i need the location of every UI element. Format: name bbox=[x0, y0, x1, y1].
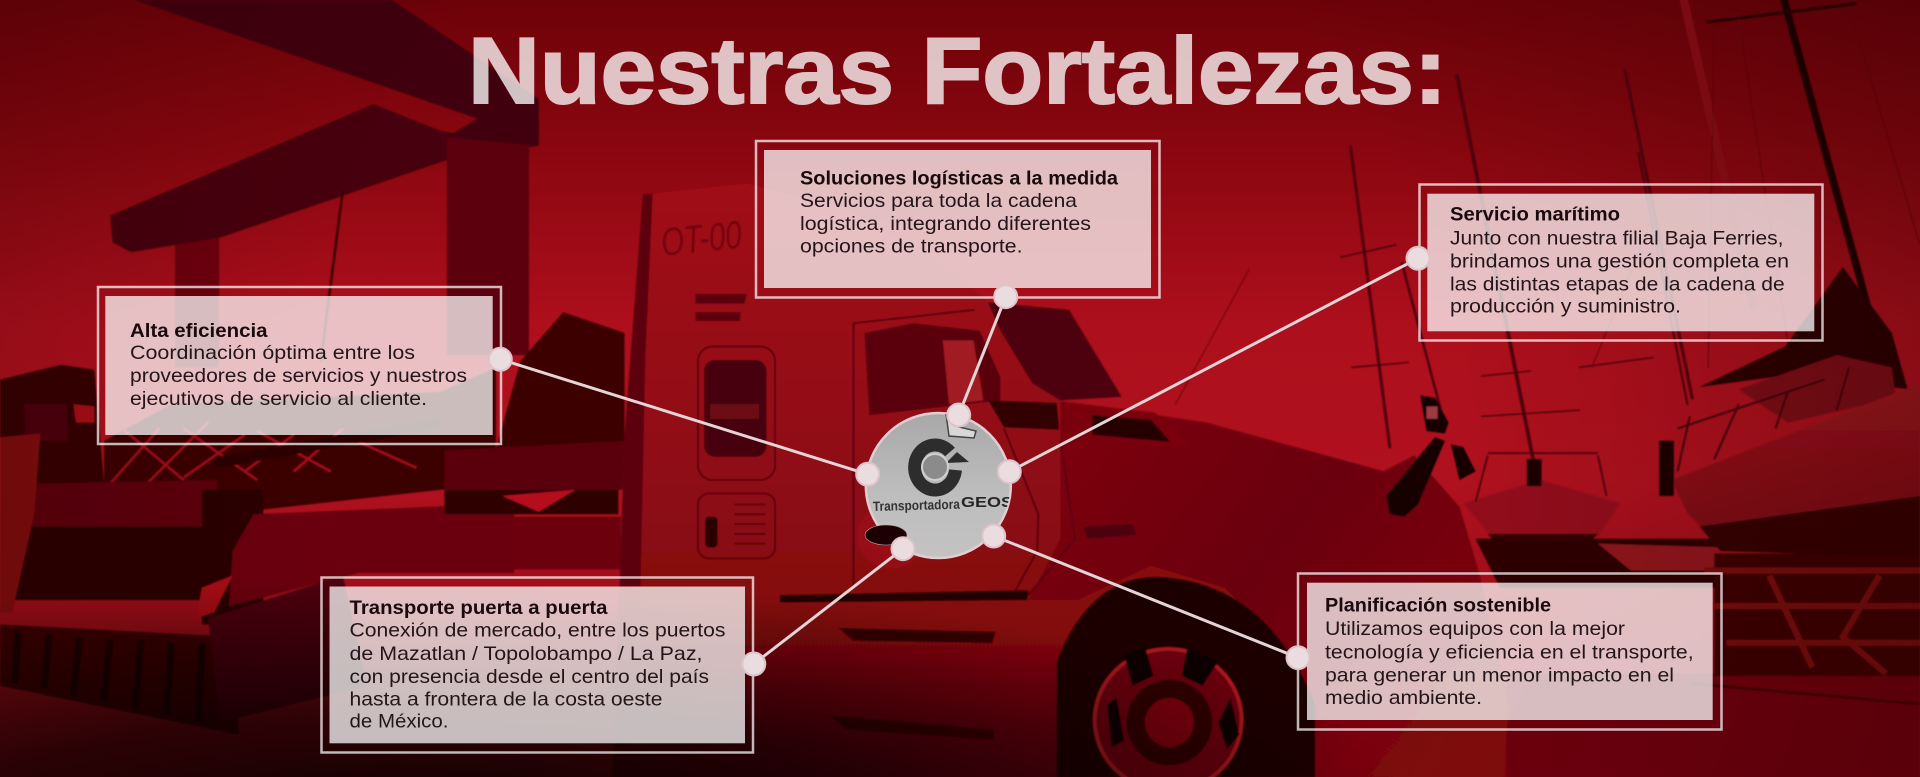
truck unit number: OT-00 bbox=[659, 214, 744, 265]
body text: Coordinación óptima entre los bbox=[130, 342, 415, 364]
body text: Servicios para toda la cadena bbox=[800, 190, 1077, 212]
title: Nuestras Fortalezas: bbox=[468, 18, 1447, 123]
rock pile bbox=[490, 312, 624, 490]
icon: door handle bbox=[946, 414, 976, 438]
heading: Alta eficiencia bbox=[130, 320, 268, 342]
gantry crane bbox=[110, 0, 539, 367]
heading: Servicio marítimo bbox=[1450, 204, 1620, 226]
side window bbox=[864, 323, 1000, 415]
body text: para generar un menor impacto en el bbox=[1325, 664, 1674, 686]
icon: door badge bbox=[865, 525, 907, 545]
body text: ejecutivos de servicio al cliente. bbox=[130, 388, 427, 410]
body text: producción y suministro. bbox=[1450, 296, 1681, 318]
body text: brindamos una gestión completa en bbox=[1450, 250, 1789, 272]
body text: las distintas etapas de la cadena de bbox=[1450, 274, 1785, 296]
scaffold and ground bbox=[1506, 553, 1920, 777]
body text: tecnología y eficiencia en el transporte, bbox=[1325, 641, 1694, 663]
body text: con presencia desde el centro del país bbox=[350, 666, 709, 688]
panel: Soluciones logísticas a la medida bbox=[756, 141, 1160, 298]
body text: de México. bbox=[350, 711, 448, 733]
body text: Conexión de mercado, entre los puertos bbox=[350, 620, 726, 642]
body text: hasta a frontera de la costa oeste bbox=[350, 689, 662, 711]
logo wordmark: Transportadora bbox=[873, 497, 960, 514]
connector dots bbox=[489, 247, 1430, 676]
body text: opciones de transporte. bbox=[800, 236, 1022, 258]
truck cab bbox=[612, 184, 1509, 777]
central logo circle bbox=[865, 413, 1013, 558]
dash shadow bbox=[988, 400, 1059, 430]
body text: medio ambiente. bbox=[1325, 687, 1482, 709]
left heavy machinery bbox=[0, 365, 624, 735]
lower body stripe bbox=[780, 590, 1029, 602]
heading: Transporte puerta a puerta bbox=[350, 597, 608, 619]
body text: de Mazatlan / Topolobampo / La Paz, bbox=[350, 643, 702, 665]
panel: Servicio marítimo bbox=[1420, 184, 1822, 340]
hood vent bbox=[1060, 402, 1191, 447]
dark hull behind boats bbox=[1476, 539, 1720, 588]
small motor boat bbox=[1598, 544, 1724, 571]
panel: Transporte puerta a puerta bbox=[322, 578, 753, 752]
door and panels bbox=[853, 310, 1075, 600]
panel: Planificación sostenible bbox=[1298, 574, 1722, 730]
connector lines bbox=[500, 258, 1418, 664]
body text bbox=[800, 190, 1091, 258]
body text: proveedores de servicios y nuestros bbox=[130, 365, 467, 387]
body text: Utilizamos equipos con la mejor bbox=[1325, 618, 1626, 640]
heading: Planificación sostenible bbox=[1325, 595, 1551, 617]
wheel bbox=[1057, 577, 1315, 777]
body text: logística, integrando diferentes bbox=[800, 213, 1091, 235]
big sailboat bbox=[1659, 267, 1920, 557]
body text bbox=[130, 342, 467, 410]
body text bbox=[1325, 618, 1694, 709]
logo wordmark GEOS: GEOS bbox=[961, 494, 1013, 511]
hood and fender bbox=[1029, 402, 1509, 777]
body text bbox=[350, 620, 726, 733]
side mirrors bbox=[1386, 396, 1476, 517]
body text bbox=[1450, 227, 1789, 318]
windshield bbox=[988, 302, 1122, 400]
small sailboat bbox=[1463, 453, 1620, 558]
panel: Alta eficiencia bbox=[98, 287, 501, 444]
heading: Soluciones logísticas a la medida bbox=[800, 168, 1118, 190]
icon: logo ring with arrow bbox=[915, 445, 969, 490]
ship masts and rigging bbox=[1176, 0, 1920, 478]
body text: Junto con nuestra filial Baja Ferries, bbox=[1450, 227, 1784, 249]
